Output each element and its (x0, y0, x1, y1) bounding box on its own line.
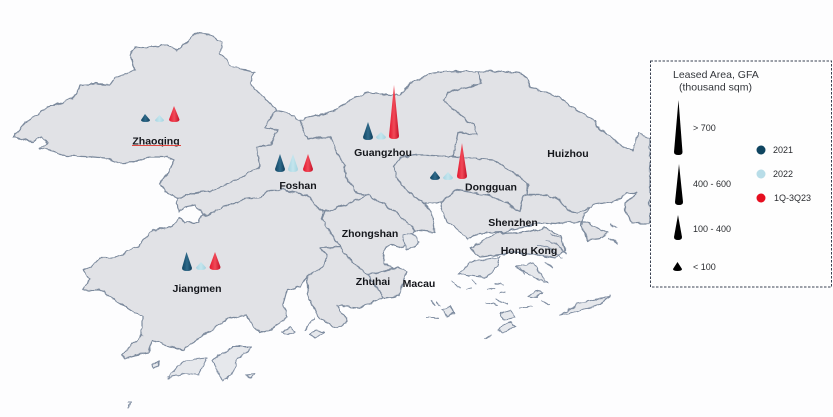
region: Guangzhou (300, 71, 482, 232)
legend panel (650, 61, 832, 287)
region: Foshan (177, 110, 367, 215)
legend key: 2022: 2022 (773, 169, 793, 179)
region: Dongguan (393, 155, 528, 212)
region: Zhaoqing (13, 33, 278, 198)
legend title: (thousand sqm) (679, 82, 752, 94)
legend cone: 400 to 600 (675, 164, 731, 205)
legend cone: 400 to 600: 400 - 600 (693, 179, 731, 189)
cones: Jiangmen (182, 252, 220, 271)
legend cone: over 700: > 700 (693, 123, 716, 133)
legend cone: under 100 (673, 262, 716, 272)
label: Zhuhai: Zhuhai (356, 276, 390, 288)
legend cone: 100 to 400: 100 - 400 (693, 224, 731, 234)
cones: Zhaoqing (141, 106, 180, 122)
legend cone: under 100: < 100 (693, 262, 716, 272)
label: Jiangmen: Jiangmen (172, 283, 222, 295)
cones: Foshan (275, 154, 313, 172)
legend key: 2021 (756, 145, 793, 155)
legend key: 2022 (756, 169, 793, 179)
label: Dongguan: Dongguan (465, 182, 517, 194)
coastal islands (128, 224, 617, 408)
cones: Dongguan (430, 143, 467, 180)
region: Zhuhai (307, 247, 385, 328)
legend cone: over 700 (674, 100, 716, 155)
cones: Guangzhou (363, 85, 399, 140)
island: Hong Kong south (515, 263, 548, 283)
label: Guangzhou: Guangzhou (354, 147, 412, 159)
label: Zhongshan: Zhongshan (342, 228, 398, 240)
region: Jiangmen (83, 190, 340, 358)
label: Huizhou: Huizhou (547, 148, 589, 160)
island: Lantau (458, 257, 500, 278)
region: Hong Kong (470, 228, 565, 258)
region: Shenzhen (440, 190, 608, 240)
legend title: Leased Area, GFA (673, 69, 759, 81)
legend key: 1Q-3Q23 (756, 193, 811, 203)
region: Zhongshan (322, 195, 415, 275)
legend key: 2021: 2021 (773, 145, 793, 155)
legend cone: 100 to 400 (674, 215, 731, 240)
region: Huizhou (443, 71, 650, 223)
label: Shenzhen: Shenzhen (488, 217, 538, 229)
label: Macau: Macau (403, 278, 435, 290)
map of the Greater Bay Area (13, 33, 650, 408)
label: Hong Kong: Hong Kong (501, 245, 557, 257)
region: Macau and Zhongshan coast (368, 267, 407, 298)
label: Foshan: Foshan (279, 180, 317, 192)
legend key: 1Q-3Q23: 1Q-3Q23 (774, 193, 811, 203)
legend title (673, 69, 759, 94)
label: Zhaoqing: Zhaoqing (132, 136, 180, 148)
